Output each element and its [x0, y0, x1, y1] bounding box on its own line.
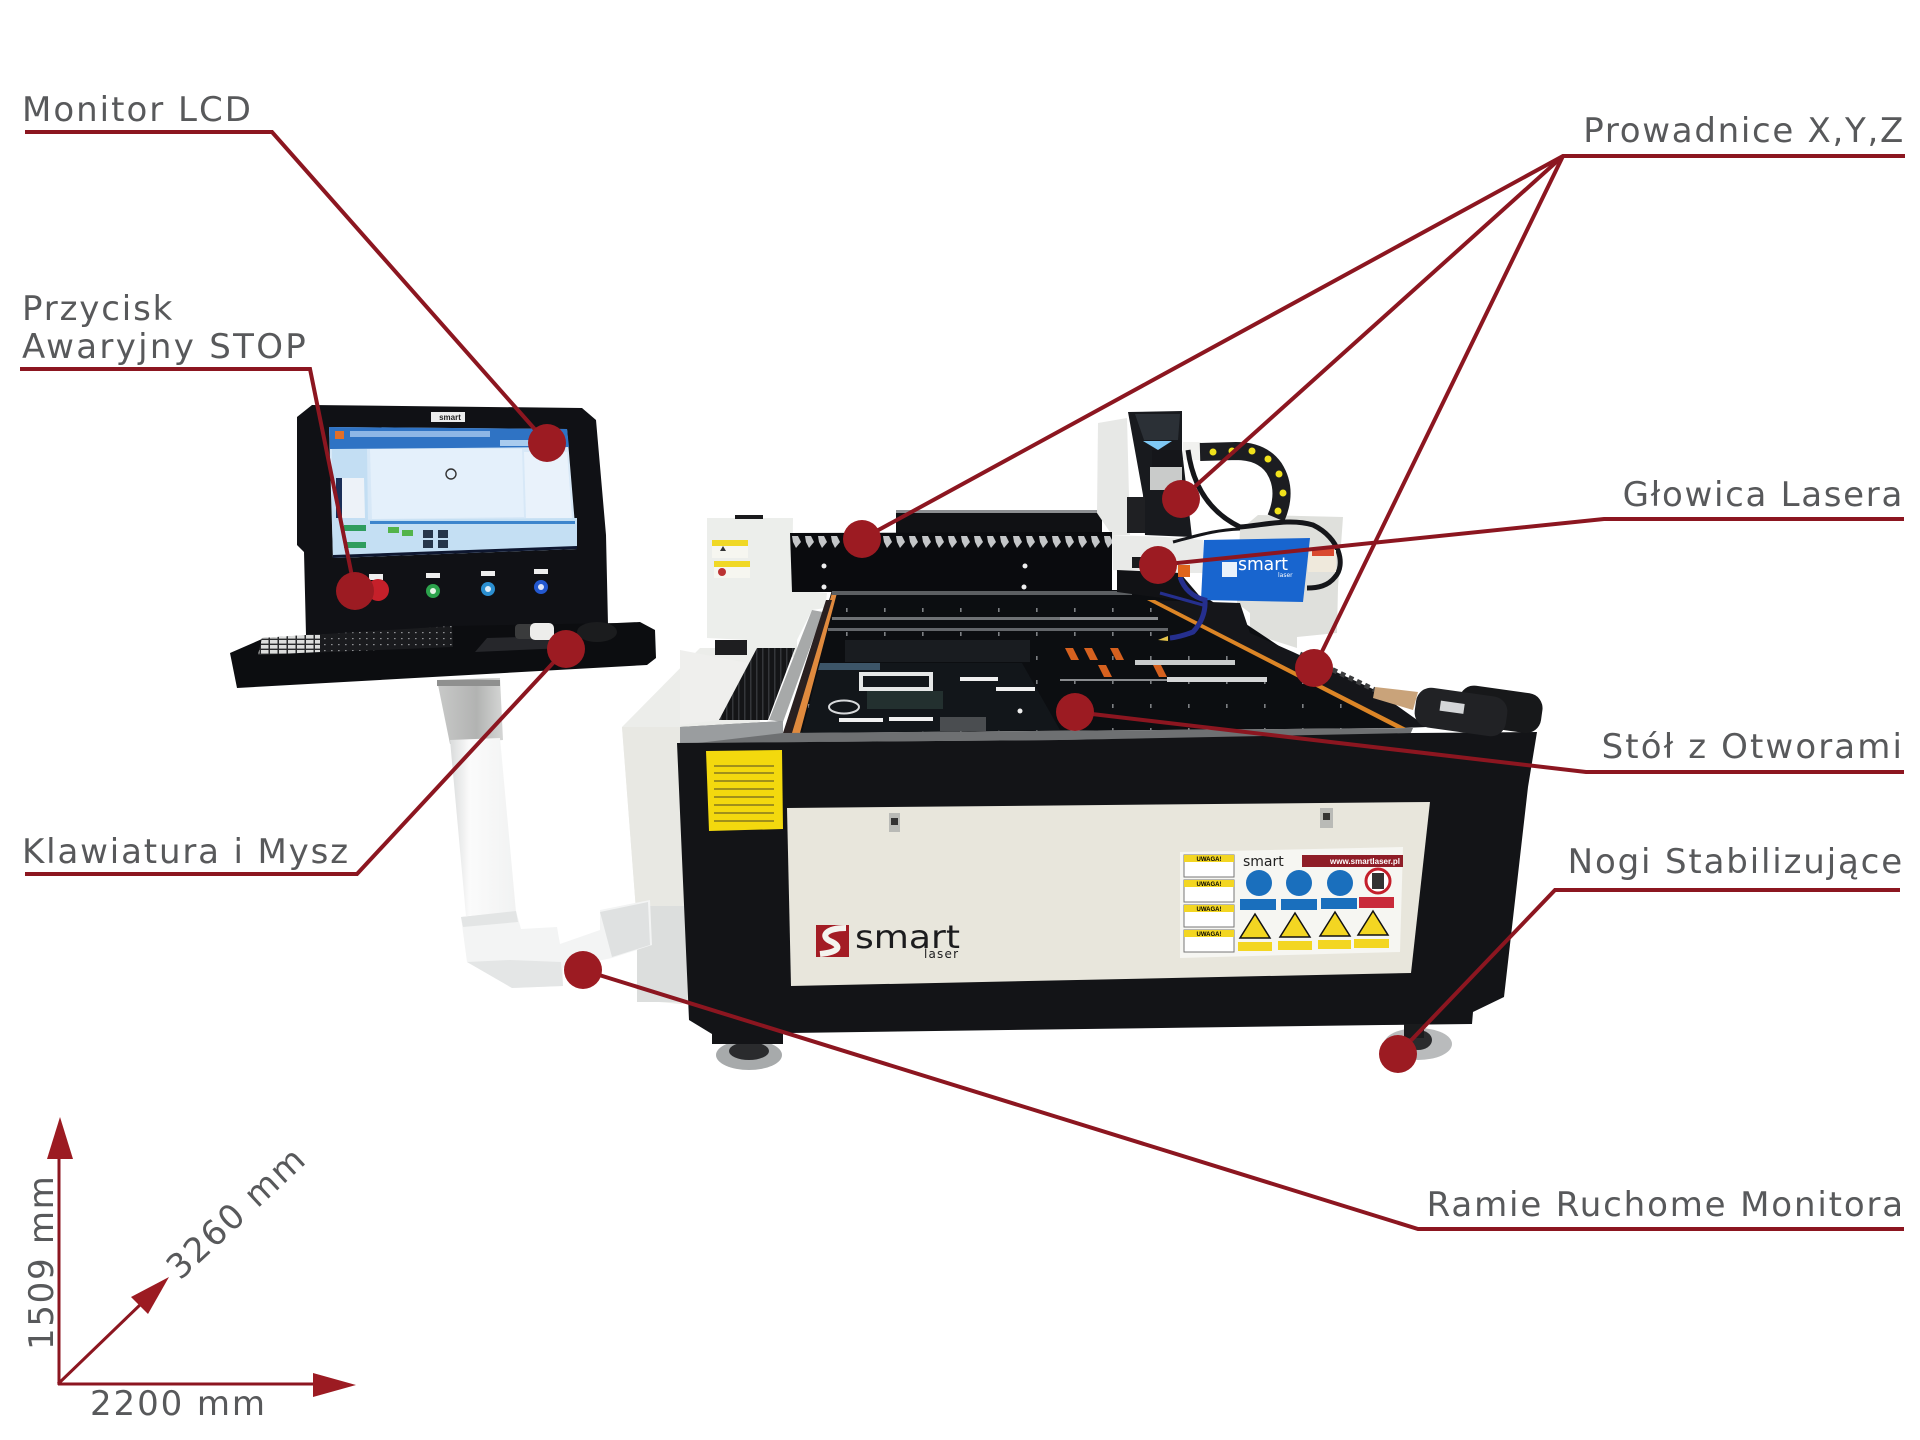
white cabinet behind the machine [622, 648, 760, 1004]
front panel [787, 802, 1430, 986]
callout: Przycisk Awaryjny STOP: Przycisk [22, 289, 174, 329]
cable bundle [1173, 450, 1340, 588]
X gantry beam [790, 532, 1132, 595]
panel logo: smart [855, 918, 960, 956]
blue cover [1201, 538, 1310, 602]
front body [677, 732, 1537, 1034]
callout: Głowica Lasera: Głowica Lasera [1623, 475, 1904, 515]
sticker logo: smart [1243, 854, 1284, 870]
head column [1097, 411, 1192, 537]
coolant hose [1158, 577, 1205, 641]
website banner: www.smartlaser.pl [1329, 857, 1400, 866]
monitor logo: smart [439, 413, 461, 422]
callout: Nogi Stabilizujące [1379, 842, 1904, 1073]
label: depth: 3260 mm [159, 1139, 314, 1288]
callout: Prowadnice X,Y,Z [843, 111, 1905, 687]
mouse [577, 622, 617, 642]
table [791, 590, 1402, 733]
warning column [1184, 855, 1234, 952]
right white box [1237, 515, 1343, 648]
height arrow [47, 1117, 73, 1385]
callout: Ramie Ruchome Monitora: Ramie Ruchome Monitora [1427, 1185, 1905, 1225]
width arrow [58, 1373, 356, 1397]
cut sheet [802, 663, 1060, 733]
warning column: UWAGA! [1196, 932, 1222, 938]
head carriage [1112, 535, 1203, 603]
control panel with monitor [230, 405, 656, 688]
steel lip [680, 721, 1413, 743]
joystick [515, 623, 554, 640]
callout: Przycisk Awaryjny STOP: Awaryjny STOP [22, 327, 308, 367]
wooden block [1373, 687, 1418, 710]
support rails [1060, 617, 1267, 682]
callout: Klawiatura i Mysz: Klawiatura i Mysz [22, 832, 350, 872]
hazard triangles [1238, 911, 1389, 951]
callout: Monitor LCD [22, 90, 566, 462]
rear white box left [707, 515, 827, 657]
back beam [896, 510, 1102, 536]
callout: Stół z Otworami [1056, 693, 1904, 772]
callout: Stół z Otworami: Stół z Otworami [1602, 727, 1904, 767]
label: width: 2200 mm [90, 1384, 267, 1424]
monitor logo [431, 412, 465, 422]
monitor arm [437, 678, 652, 988]
safety sticker [1180, 847, 1403, 958]
blue cover: laser [1278, 572, 1293, 579]
monitor housing [297, 405, 608, 635]
emergency stop button [367, 574, 389, 601]
control buttons [426, 569, 548, 598]
panel logo [816, 918, 960, 961]
callout: Nogi Stabilizujące: Nogi Stabilizujące [1568, 842, 1904, 882]
callout: Głowica Lasera [1139, 475, 1904, 584]
website banner [1302, 855, 1403, 867]
laser machine [677, 411, 1544, 1070]
warning column: UWAGA! [1196, 907, 1222, 913]
drag chain [1183, 442, 1286, 518]
callout: Klawiatura i Mysz [22, 630, 585, 874]
warning column: UWAGA! [1196, 857, 1222, 863]
depth arrow [58, 1277, 169, 1384]
warning column: UWAGA! [1196, 882, 1222, 888]
warning sticker yellow [706, 750, 783, 831]
shelf [230, 622, 656, 688]
label: height: 1509 mm [22, 1175, 62, 1350]
keyboard [258, 626, 453, 655]
LCD screen [329, 427, 577, 558]
orange fitting [1178, 565, 1190, 577]
left vent rack [719, 648, 795, 720]
callout: Przycisk Awaryjny STOP [20, 289, 374, 610]
latches [889, 808, 1333, 832]
cases [1413, 684, 1544, 738]
stabilizing feet [712, 1024, 1452, 1070]
callout: Ramie Ruchome Monitora [564, 951, 1905, 1229]
left steel rail [769, 593, 837, 733]
callout: Prowadnice X,Y,Z: Prowadnice X,Y,Z [1583, 111, 1905, 151]
blue cover: smart [1238, 554, 1288, 575]
callout: Monitor LCD: Monitor LCD [22, 90, 253, 130]
right rail [1147, 600, 1427, 728]
dimensions diagram [22, 1117, 356, 1424]
mouse pad [475, 636, 565, 652]
panel logo: laser [924, 947, 958, 961]
mandatory icons [1240, 869, 1394, 910]
